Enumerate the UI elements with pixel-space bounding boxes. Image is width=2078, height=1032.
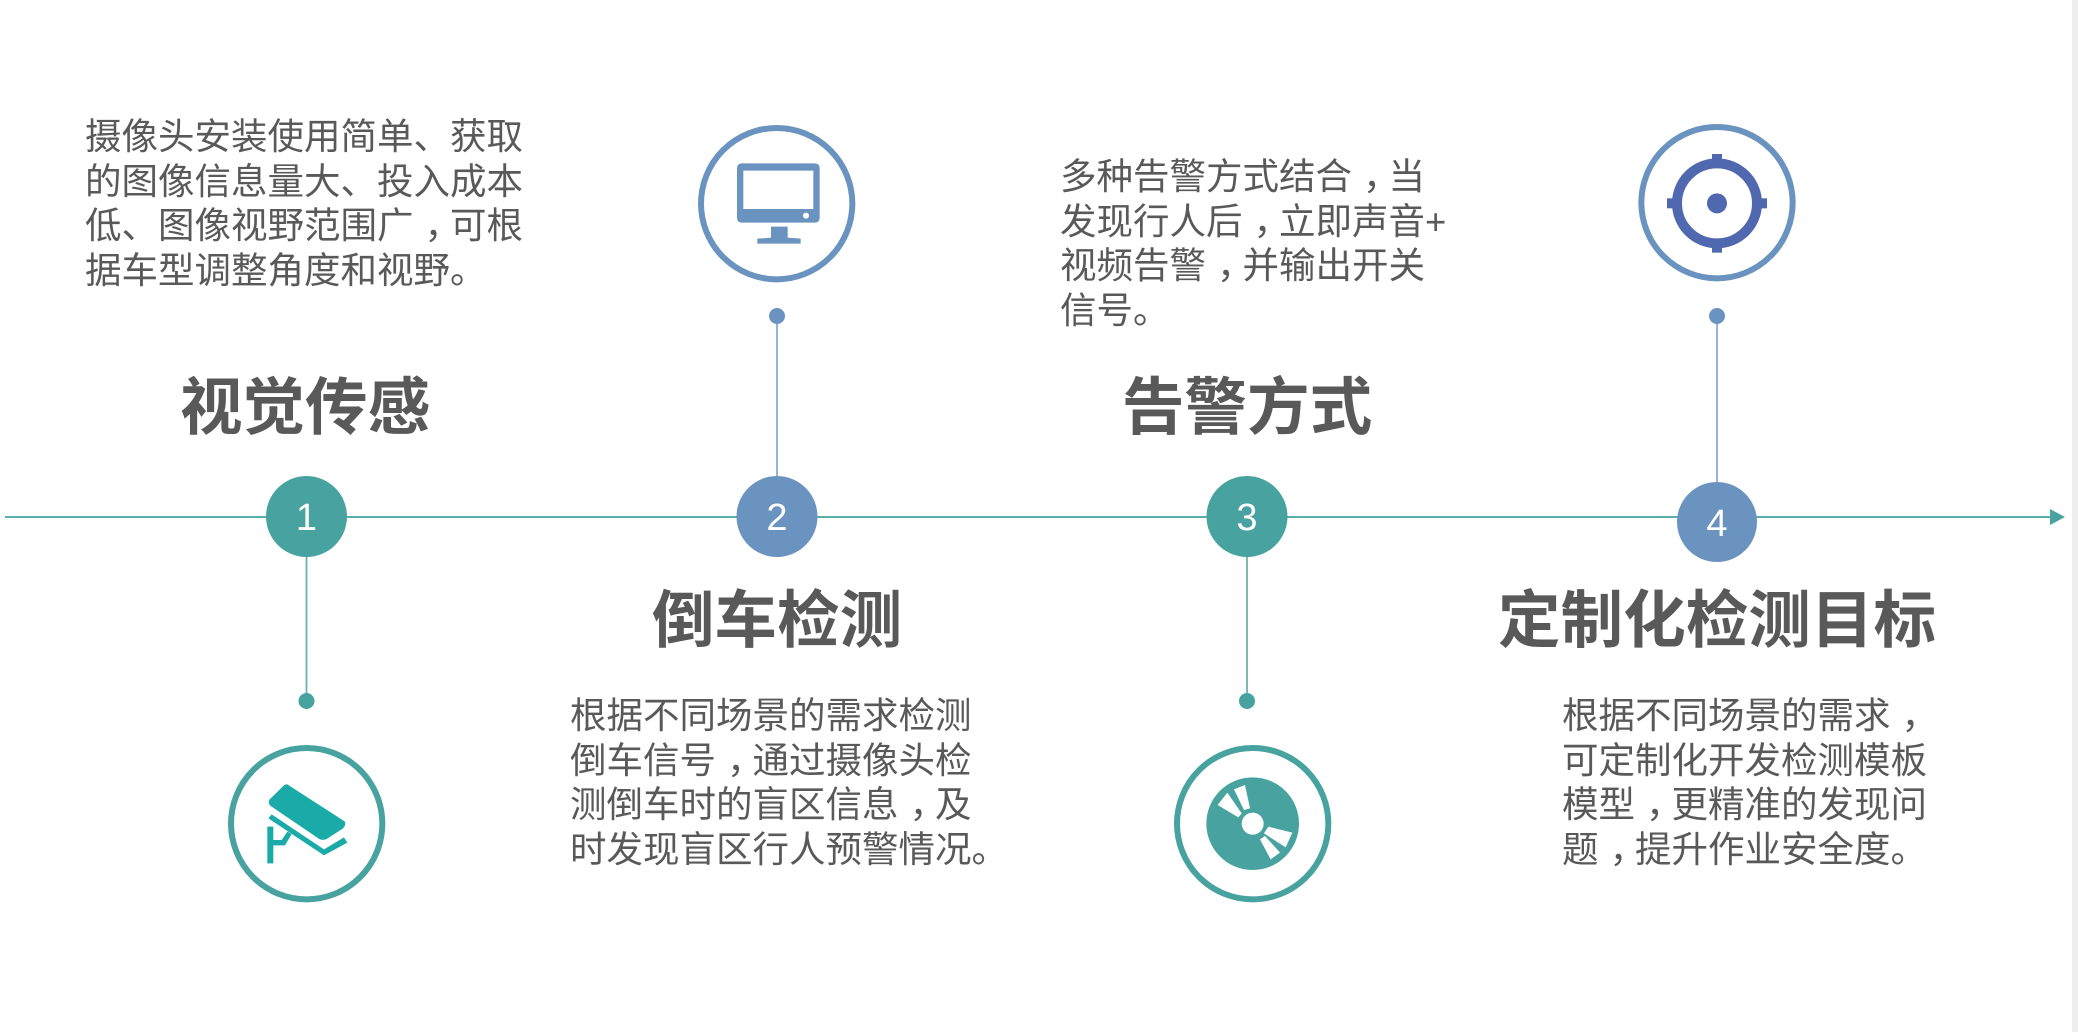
- text: 告警方式 description: 信号。: [1060, 290, 1170, 331]
- text: 定制化检测目标 description: 模型 ，更精准的发现问: [1562, 784, 1927, 825]
- text: 倒车检测 description: 根据不同场景的需求检测: [570, 695, 972, 736]
- node 3 connector: [1239, 517, 1255, 709]
- icon: disc: [1177, 748, 1328, 899]
- node 2 circle: [736, 476, 818, 557]
- node 1 circle: [266, 476, 347, 557]
- heading: 告警方式: 告警方式: [1122, 373, 1372, 443]
- node 4 connector: [1709, 308, 1725, 517]
- node 1 connector: [298, 517, 314, 709]
- text: 倒车检测 description: 测倒车时的盲区信息 ，及: [570, 784, 972, 825]
- timeline arrow: [5, 509, 2065, 525]
- text: 视觉传感 description: 摄像头安装使用简单、获取: [85, 116, 523, 157]
- text: 定制化检测目标 description: 可定制化开发检测模板: [1562, 740, 1927, 781]
- text: 倒车检测 description: 倒车信号 ，通过摄像头检: [570, 740, 972, 781]
- heading: 视觉传感: 视觉传感: [180, 373, 430, 443]
- text: 定制化检测目标 description: [1562, 695, 1938, 870]
- node 4 circle: [1677, 482, 1757, 562]
- number 2: 2: [766, 497, 788, 539]
- number 1: 1: [296, 497, 317, 539]
- node 3 circle: [1206, 476, 1288, 557]
- number 3: 3: [1236, 497, 1258, 539]
- text: 告警方式 description: [1060, 156, 1446, 331]
- text: 倒车检测 description: 时发现盲区行人预警情况。: [570, 829, 1008, 870]
- text: 视觉传感 description: 低、图像视野范围广 ，可根: [85, 205, 523, 246]
- text: 定制化检测目标 description: 题 ，提升作业安全度。: [1562, 829, 1927, 870]
- icon: security camera: [231, 748, 382, 899]
- text: 视觉传感 description: 的图像信息量大、投入成本: [85, 161, 523, 202]
- text: 视觉传感 description: [85, 116, 523, 291]
- text: 倒车检测 description: [570, 695, 1008, 870]
- scrollbar strip: [2072, 0, 2078, 1032]
- text: 定制化检测目标 description: 根据不同场景的需求 ，: [1562, 695, 1938, 736]
- text: 视觉传感 description: 据车型调整角度和视野。: [85, 250, 486, 291]
- text: 告警方式 description: 发现行人后 ，立即声音+: [1060, 201, 1446, 242]
- text: 告警方式 description: 视频告警 ，并输出开关: [1060, 245, 1425, 286]
- heading: 定制化检测目标: 定制化检测目标: [1498, 586, 1936, 656]
- icon: target: [1641, 127, 1793, 278]
- node 2 connector: [769, 308, 785, 517]
- text: 告警方式 description: 多种告警方式结合 ，当: [1060, 156, 1425, 197]
- icon: monitor: [701, 128, 852, 279]
- heading: 倒车检测: 倒车检测: [652, 586, 902, 656]
- number 4: 4: [1706, 503, 1728, 545]
